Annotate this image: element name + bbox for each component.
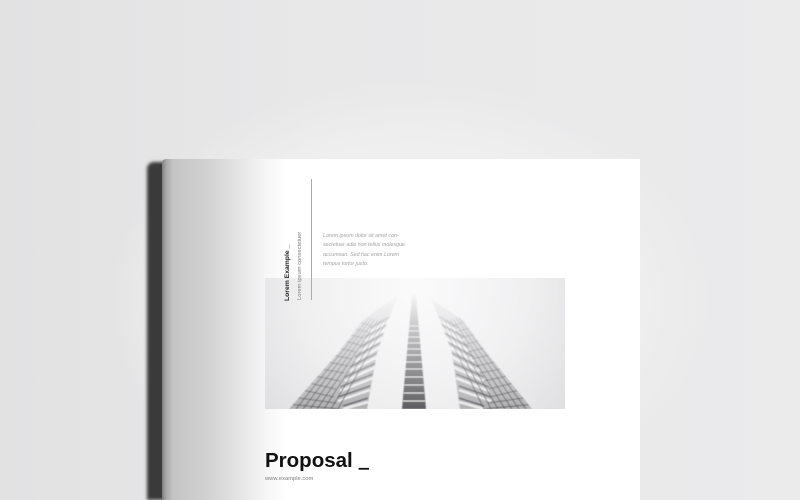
title: Proposal _ [265, 449, 368, 472]
label: Lorem Example: Lorem Example _ [284, 245, 291, 301]
brochure page [162, 159, 640, 500]
label: Lorem ipsum consectetuer: Lorem ipsum consectetuer [297, 232, 303, 300]
photo: foggy skyscraper [265, 278, 565, 409]
vertical rule [311, 179, 312, 300]
spine gradient [162, 159, 287, 500]
intro paragraph: sectetuer adie non tellus molesque [323, 242, 405, 248]
intro paragraph: tempus tortor justo. [323, 261, 368, 267]
intro paragraph: accumsan. Sed hac enim Lorem [323, 252, 399, 258]
intro paragraph [323, 233, 405, 267]
left facade [289, 306, 392, 409]
brochure shadow [147, 162, 177, 500]
vertical heading [284, 232, 303, 301]
right facade [435, 306, 532, 409]
intro paragraph: Lorem ipsum dolor sit amet con- [323, 233, 399, 239]
website: www.example.com [265, 476, 313, 482]
centre strip [402, 295, 426, 409]
